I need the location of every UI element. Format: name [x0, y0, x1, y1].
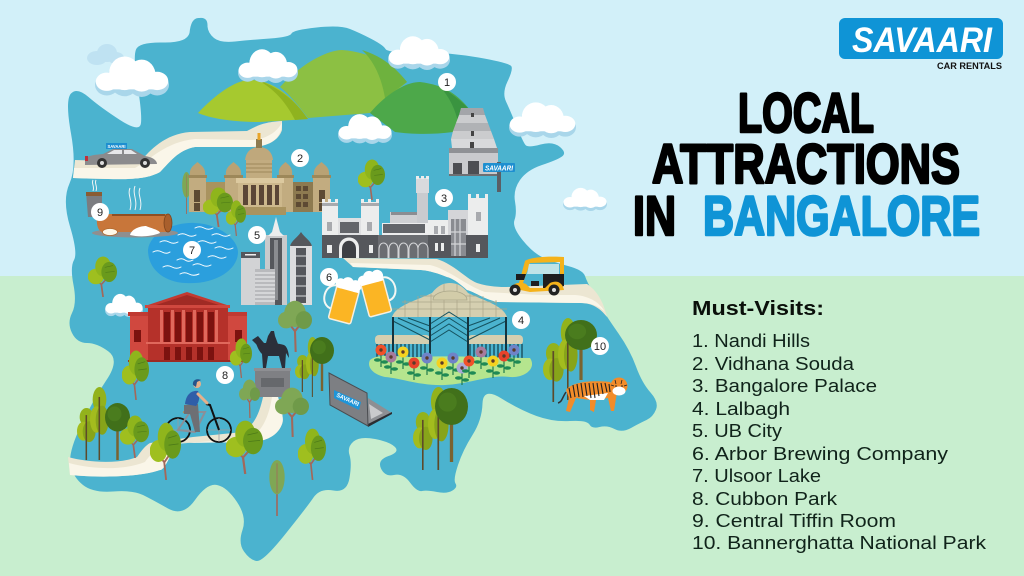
cloud: far right — [563, 188, 607, 211]
tree: above palace — [358, 159, 385, 200]
number badge 10: 10 — [594, 341, 606, 353]
tree: by pedestal — [239, 380, 260, 418]
tree: Vidhana Souda front — [203, 187, 233, 227]
cloud: right — [509, 102, 576, 138]
tree: park round — [565, 320, 597, 380]
auto rickshaw — [510, 257, 564, 296]
list of attractions: 8. Cubbon Park — [692, 489, 838, 509]
tree: north of statue — [278, 301, 312, 352]
number badge 4: 4 — [518, 315, 524, 327]
title: LOCAL — [738, 81, 874, 144]
title: IN — [633, 184, 676, 247]
heading: Must-Visits: Must-Visits: — [692, 298, 824, 320]
logo: Savaari Car Rentals: SAVAARI — [852, 21, 993, 60]
number badge 7 — [183, 241, 201, 259]
list of attractions: 3. Bangalore Palace — [692, 376, 877, 396]
tree: below court — [122, 351, 149, 400]
flowers — [374, 344, 521, 385]
logo: Savaari Car Rentals — [839, 18, 1003, 72]
list of attractions: 10. Bannerghatta National Park — [692, 533, 987, 553]
number badge 9 — [91, 203, 109, 221]
number badge 6 — [320, 268, 338, 286]
tree: west tall 2 — [90, 387, 109, 460]
tree: park tall 2 — [558, 318, 578, 400]
tree: behind Vidhana Souda — [182, 172, 191, 214]
map of Bangalore — [66, 18, 657, 561]
tree: slim south — [269, 460, 285, 516]
temple with sign: SAVAARI — [485, 166, 514, 172]
cloud: top centre — [388, 36, 450, 70]
tree: park tall 1 — [543, 343, 564, 402]
number badge 3: 3 — [441, 193, 447, 205]
tree: by road — [150, 423, 181, 480]
background: sky — [0, 0, 1024, 276]
list of attractions: 4. Lalbagh — [692, 399, 790, 419]
tree: south tall 1 — [413, 412, 433, 470]
title — [633, 81, 980, 247]
number badge 5 — [248, 226, 266, 244]
UB City towers — [241, 217, 312, 305]
number badge 9: 9 — [97, 207, 103, 219]
road: north — [73, 121, 282, 179]
cloud: on hills — [238, 49, 298, 83]
tree: south tall 2 — [428, 387, 449, 470]
tree: west small — [120, 415, 149, 458]
Central Tiffin Room food — [86, 180, 178, 238]
tree: group by statue tall 1 — [295, 355, 310, 392]
logo: Savaari Car Rentals: CAR RENTALS — [937, 61, 1002, 72]
number badge 8: 8 — [222, 370, 228, 382]
list of attractions: 7. Ulsoor Lake — [692, 466, 821, 486]
lake — [148, 223, 238, 283]
tree: by cyclist — [226, 421, 263, 474]
Vidhana Souda building — [188, 133, 331, 215]
laptop — [329, 373, 392, 427]
number badge 5: 5 — [254, 230, 260, 242]
tree: right of court — [230, 338, 252, 378]
list of attractions — [692, 331, 987, 553]
hill: Nandi Hills centre — [280, 50, 407, 118]
Cubbon Park red building — [128, 292, 247, 362]
tree: east of road — [275, 388, 309, 437]
road: east — [343, 258, 607, 317]
hill: Nandi Hills right — [370, 82, 470, 134]
beer mugs — [319, 265, 401, 324]
list of attractions: 2. Vidhana Souda — [692, 354, 855, 374]
number badge 10 — [591, 337, 609, 355]
list of attractions: 1. Nandi Hills — [692, 331, 810, 351]
tree: south round — [435, 388, 468, 462]
number badge 4 — [512, 311, 530, 329]
road: south — [68, 397, 283, 477]
car: SAVAARI — [108, 144, 126, 149]
Lalbagh glass house — [369, 283, 532, 385]
number badge 2: 2 — [297, 153, 303, 165]
cloud: faint back — [87, 44, 124, 65]
tree: left of court — [88, 256, 117, 297]
Bangalore Palace building — [322, 176, 488, 258]
cloud: left lower — [105, 294, 143, 317]
tree: group by statue round — [310, 337, 334, 391]
number badge 7: 7 — [189, 245, 195, 257]
tree: west tall 1 — [77, 408, 96, 460]
tree: Vidhana Souda front small — [226, 200, 246, 236]
number badge 3 — [435, 189, 453, 207]
list of attractions: 5. UB City — [692, 421, 782, 441]
temple with sign — [449, 108, 515, 192]
cyclist — [166, 379, 231, 442]
cloud: top left — [95, 57, 169, 97]
tree: west round — [105, 403, 130, 460]
laptop: SAVAARI — [335, 393, 360, 408]
number badge 8 — [216, 366, 234, 384]
tree: group by statue tall 2 — [306, 337, 319, 397]
list of attractions: 9. Central Tiffin Room — [692, 511, 896, 531]
cloud: centre — [338, 114, 392, 144]
number badge 2 — [291, 149, 309, 167]
garden bed — [369, 356, 532, 385]
hill: Nandi Hills left — [198, 80, 308, 122]
tree: south east — [298, 429, 326, 480]
equestrian statue — [252, 331, 291, 397]
number badge 1: 1 — [444, 77, 450, 89]
number badge 1 — [438, 73, 456, 91]
tiger — [558, 378, 628, 412]
number badge 6: 6 — [326, 272, 332, 284]
background: ground — [0, 276, 1024, 576]
list of attractions: 6. Arbor Brewing Company — [692, 444, 948, 464]
car — [85, 143, 157, 168]
